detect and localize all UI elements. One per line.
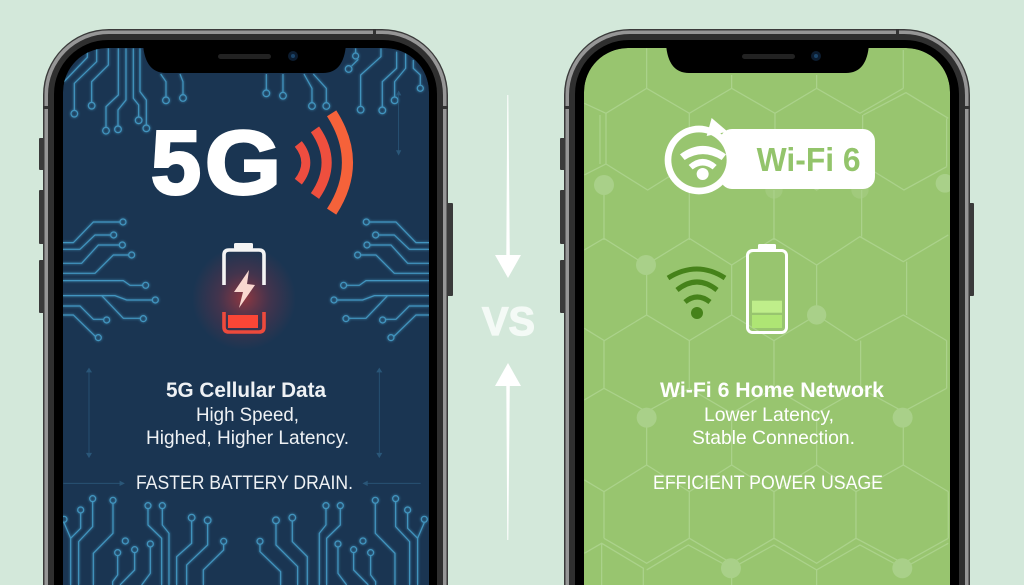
badge label: Wi-Fi 6 [757,142,861,179]
icon: wifi green [668,269,725,319]
phone frame left [43,29,448,585]
phone: Wi-Fi 6 [560,29,974,585]
text block: Wi-Fi 6 [653,378,884,494]
icon: signal waves [298,113,347,212]
icon: full battery [748,244,786,332]
hexagon nodes [594,174,954,578]
text block: 5G: Highed, Higher Latency. [146,427,349,449]
left mid circuit [63,219,158,341]
phone: 5G [39,29,453,585]
notch left [143,44,346,73]
5G logo [151,114,281,214]
phone frame right [564,29,970,585]
ring [665,126,733,194]
text block: 5G [136,379,353,494]
bottom circuits [61,496,427,585]
icon: low battery with bolt [224,243,264,332]
VS label: VS [482,300,535,344]
screen right [584,48,954,585]
side buttons right phone [560,138,974,313]
side buttons left phone [39,138,453,313]
icon: wifi in badge [680,146,726,169]
arrow: down [495,95,521,278]
hexagon pattern [584,48,948,585]
screen left [61,48,429,585]
text block: Wi-Fi 6: Lower Latency, [704,404,834,426]
notch right [666,44,869,73]
text block: 5G: 5G Cellular Data [166,379,326,402]
arrow: up [495,363,521,540]
text block: 5G: High Speed, [196,404,299,426]
5G logo: 5 [151,114,201,214]
5G logo: G [205,114,281,214]
right mid circuit [331,219,429,341]
arrowhead [707,118,728,136]
text block: Wi-Fi 6: Stable Connection. [692,427,855,449]
badge pill [720,129,875,189]
circuit traces [63,48,429,341]
red battery glow [198,252,290,344]
text block: Wi-Fi 6: EFFICIENT POWER USAGE [653,472,883,494]
faint arrows left screen [63,91,421,485]
text block: 5G: FASTER BATTERY DRAIN. [136,472,353,494]
text block: Wi-Fi 6: Wi-Fi 6 Home Network [660,378,884,402]
Wi-Fi 6 badge [665,118,875,194]
